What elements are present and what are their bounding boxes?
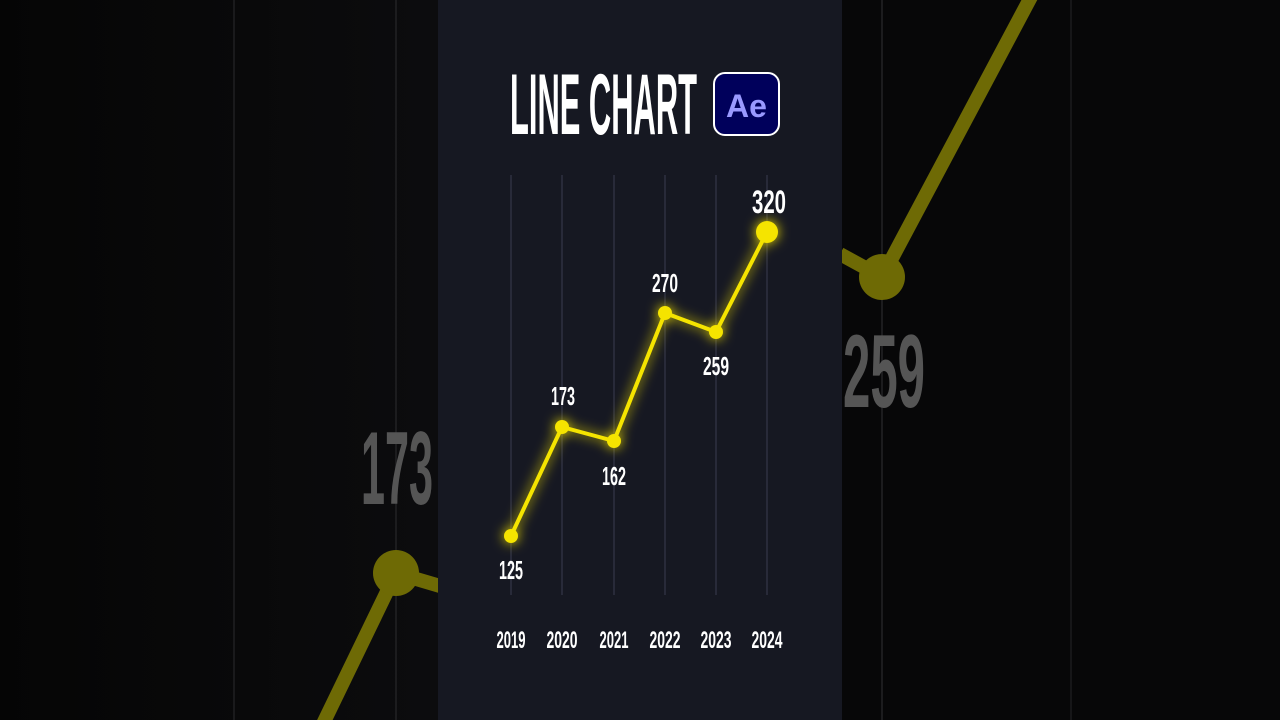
year axis labels: 2020 bbox=[546, 627, 578, 654]
value labels bbox=[499, 184, 786, 585]
year axis labels: 2024 bbox=[752, 627, 783, 654]
value labels: 162 bbox=[602, 461, 626, 491]
value labels: 173 bbox=[551, 381, 575, 411]
year axis labels: 2023 bbox=[700, 627, 732, 654]
year axis labels bbox=[496, 627, 783, 654]
value labels: 270 bbox=[652, 268, 678, 298]
center panel bbox=[438, 0, 842, 720]
icon: Ae logo bbox=[714, 73, 779, 135]
value labels: 320 bbox=[752, 184, 786, 220]
text: 173 bbox=[361, 411, 433, 527]
center panel: LINE CHART bbox=[510, 57, 697, 153]
year axis labels: 2022 bbox=[650, 627, 680, 654]
year axis labels: 2019 bbox=[496, 627, 526, 654]
value labels: 259 bbox=[703, 351, 729, 381]
value labels: 125 bbox=[499, 555, 523, 585]
line chart bbox=[504, 221, 778, 543]
background right: 259 bbox=[843, 314, 925, 430]
grid lines bbox=[511, 175, 767, 595]
background right bbox=[840, 0, 1280, 720]
icon: Ae logo: Ae bbox=[726, 88, 767, 124]
background left bbox=[0, 0, 440, 720]
year axis labels: 2021 bbox=[600, 627, 628, 654]
